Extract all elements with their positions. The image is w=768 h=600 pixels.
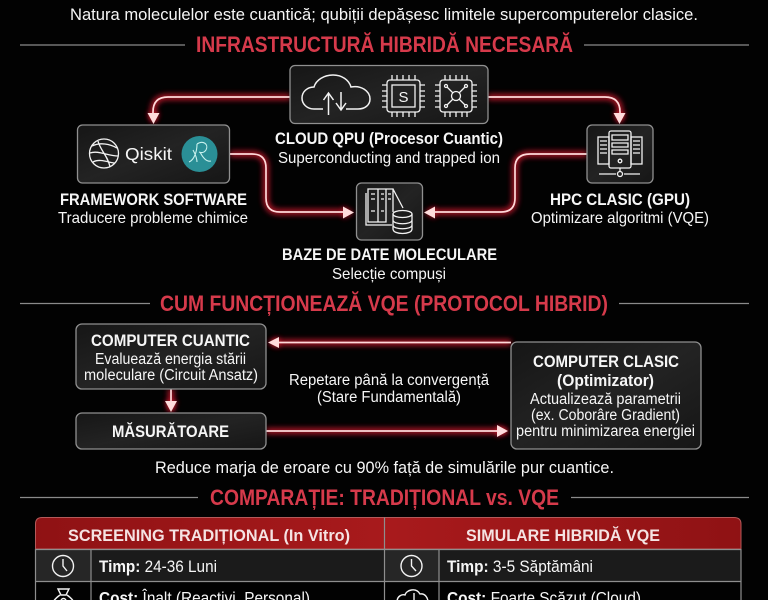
text: molecular databases: [282, 245, 497, 283]
icon: globe: [90, 139, 118, 168]
text: HPC: HPC CLASIC (GPU): [550, 190, 690, 209]
text: molecular databases: Selecție compuși: [332, 266, 446, 283]
arrow: quantum to measurement: [165, 389, 177, 412]
icon: S chip: [382, 75, 425, 117]
arrow: cloud to framework: [148, 97, 290, 124]
S letter: S: [398, 89, 409, 106]
arrow: cloud to HPC: [488, 97, 626, 124]
icon: clock left: [52, 556, 74, 576]
panel: cloud QPU: [290, 66, 488, 124]
icon: books and database: [366, 189, 412, 234]
panel: measurement: [76, 413, 266, 449]
arrow: classical to quantum: [268, 337, 511, 348]
panel: framework software: [78, 125, 230, 183]
panel: HPC: [587, 125, 653, 183]
table header: [36, 518, 741, 549]
panel: classical computer: [511, 342, 701, 449]
header: VQE: SIMULARE HIBRIDĂ VQE: [466, 526, 660, 545]
timp VQE: Timp: 3-5 Săptămâni: [447, 558, 593, 576]
panel: quantum computer: Evaluează energia stării: [95, 351, 246, 368]
loop label: [289, 372, 489, 406]
text: HPC: [531, 190, 709, 227]
timp traditional: Timp: 24-36 Luni: [99, 558, 217, 576]
Qiskit label: Qiskit: [125, 144, 172, 164]
panel: quantum computer: COMPUTER CUANTIC: [91, 331, 250, 350]
panel: molecular databases: [356, 183, 422, 240]
arrow: HPC to databases: [424, 154, 587, 218]
arrow: measurement to classical: [266, 425, 508, 437]
panel: classical computer: (ex. Coborâre Gradient): [531, 407, 680, 424]
icon: cloud cost: [397, 590, 428, 600]
icon: teal logo: [182, 136, 218, 172]
error reduction note: Reduce marja de eroare cu 90% față de simulările pur cuantice.: [155, 458, 614, 477]
text: cloud QPU: CLOUD QPU (Procesor Cuantic): [275, 129, 503, 148]
panel: classical computer: COMPUTER CLASIC: [533, 352, 679, 371]
icon: network chip: [435, 75, 477, 117]
row backgrounds: [36, 550, 741, 582]
loop label: (Stare Fundamentală): [317, 389, 461, 406]
section heading: VQE protocol: CUM FUNCȚIONEAZĂ VQE (PROTOCOL HIBRID): [160, 291, 608, 316]
header: traditional: SCREENING TRADIȚIONAL (In Vitro): [68, 526, 350, 545]
section heading: comparison: COMPARAȚIE: TRADIȚIONAL vs. VQE: [210, 485, 559, 510]
panel: quantum computer: moleculare (Circuit Ansatz): [84, 367, 258, 384]
text: framework software: [58, 190, 248, 227]
panel: classical computer: pentru minimizarea energiei: [516, 423, 695, 440]
icon: clock right: [401, 556, 422, 576]
text: cloud QPU: Superconducting and trapped ion: [278, 150, 500, 167]
text: molecular databases: BAZE DE DATE MOLECULARE: [282, 245, 497, 264]
intro text: Natura moleculelor este cuantică; qubiții depășesc limitele supercomputerelor clasice.: [70, 5, 698, 24]
text: framework software: Traducere probleme chimice: [58, 210, 248, 227]
panel: quantum computer: [76, 324, 266, 389]
text: framework software: FRAMEWORK SOFTWARE: [60, 190, 247, 209]
text: cloud QPU: [275, 129, 503, 167]
loop label: Repetare până la convergență: [289, 372, 489, 389]
text: HPC: Optimizare algoritmi (VQE): [531, 210, 709, 227]
arrow: framework to databases: [230, 154, 354, 218]
icon: server: [598, 131, 642, 176]
comparison table: [36, 518, 741, 600]
section heading: infrastructure: INFRASTRUCTURĂ HIBRIDĂ NECESARĂ: [196, 32, 573, 57]
panel: classical computer: (Optimizator): [557, 371, 654, 390]
panel: classical computer: Actualizează parametrii: [530, 391, 681, 408]
icon: cloud: [302, 75, 370, 115]
panel: measurement: MĂSURĂTOARE: [112, 422, 229, 441]
icon: money bag: [52, 589, 75, 600]
